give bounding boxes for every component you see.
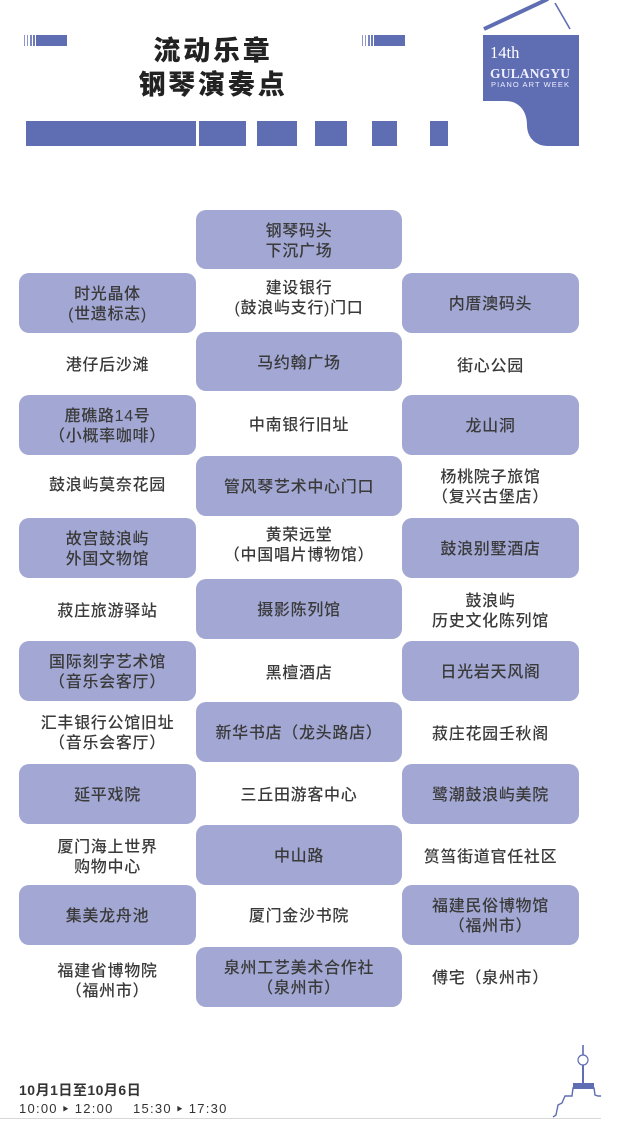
logo: piano art week: 14th: [490, 43, 520, 62]
venue: 杨桃院子旅馆: [432, 468, 549, 506]
bottom rule: [0, 1118, 601, 1119]
venue: 管风琴艺术中心门口: 管风琴艺术中心门口: [224, 479, 374, 496]
venue: 中山路: 中山路: [274, 848, 324, 865]
venue: 鼓浪屿莫奈花园: 鼓浪屿莫奈花园: [49, 477, 166, 494]
venue: 厦门海上世界购物中心: [57, 838, 158, 876]
venue: 国际刻字艺术馆: （音乐会客厅）: [49, 674, 166, 691]
venue: 菽庄花园壬秋阁: 菽庄花园壬秋阁: [432, 726, 549, 743]
venue: 日光岩天风阁: 日光岩天风阁: [440, 664, 541, 681]
venue: 福建省博物院: 福建省博物院: [57, 963, 158, 980]
venue: 新华书店: [196, 702, 402, 762]
venue: 鼓浪屿历史文化陈列馆: 鼓浪屿: [465, 593, 516, 610]
venue: 马约翰广场: [196, 332, 402, 391]
venue: 马约翰广场: 马约翰广场: [257, 354, 341, 372]
venue: 杨桃院子旅馆: 杨桃院子旅馆: [440, 469, 541, 486]
venue: 国际刻字艺术馆: 国际刻字艺术馆: [49, 654, 166, 671]
title: 流动乐章: [153, 36, 273, 66]
venue: 福建民俗博物馆: 福建民俗博物馆: [432, 898, 549, 915]
venue: 建设银行: (鼓浪屿支行)门口: [235, 300, 363, 317]
venue: 钢琴码头: 下沉广场: [266, 242, 332, 260]
venue: 中南银行旧址: 中南银行旧址: [249, 417, 349, 434]
venue: 内厝澳码头: [402, 273, 579, 333]
venue: 三丘田游客中心: 三丘田游客中心: [241, 787, 357, 804]
venue: 黄荣远堂: （中国唱片博物馆）: [224, 547, 374, 564]
decorative small bar left: [24, 35, 67, 46]
venue: 鼓浪屿历史文化陈列馆: [432, 592, 549, 630]
venue: 故宫鼓浪屿外国文物馆: [19, 518, 196, 578]
venue: 摄影陈列馆: [196, 579, 402, 639]
venue: 鼓浪别墅酒店: 鼓浪别墅酒店: [440, 541, 541, 558]
venue: 鼓浪别墅酒店: [402, 518, 579, 578]
venue: 鹿礁路14号: （小概率咖啡）: [49, 428, 166, 445]
venue: 新华书店: 新华书店（龙头路店）: [215, 725, 382, 742]
venue: 鹿礁路14号: [19, 395, 196, 455]
event dates and times: 10月1日至10月6日: [19, 1082, 141, 1098]
title: 钢琴演奏点: [138, 70, 288, 100]
venue: 街心公园: 街心公园: [457, 358, 524, 375]
venue: 泉州工艺美术合作社: [196, 947, 402, 1007]
venue: 集美龙舟池: 集美龙舟池: [66, 908, 149, 925]
venue: 厦门海上世界购物中心: 厦门海上世界: [57, 839, 158, 856]
venue: 鼓浪屿历史文化陈列馆: 历史文化陈列馆: [432, 613, 549, 630]
venue: 汇丰银行公馆旧址: （音乐会客厅）: [49, 735, 166, 752]
icon: tower skyline: [552, 1045, 601, 1118]
decorative small bar right: [362, 35, 405, 46]
venue: 厦门海上世界购物中心: 购物中心: [74, 859, 141, 876]
venue: 建设银行: 建设银行: [266, 280, 332, 297]
venue: 港仔后沙滩: 港仔后沙滩: [66, 357, 149, 374]
venue: 黄荣远堂: 黄荣远堂: [266, 527, 332, 544]
venue: 傅宅: 傅宅（泉州市）: [432, 970, 549, 987]
venue: 国际刻字艺术馆: [19, 641, 196, 701]
venue: 鹿礁路14号: 鹿礁路14号: [64, 408, 150, 425]
title: [138, 36, 288, 100]
venue: 建设银行: [235, 279, 363, 317]
venue: 黄荣远堂: [224, 526, 374, 564]
venue: 菽庄旅游驿站: 菽庄旅游驿站: [57, 603, 158, 620]
venue: 时光晶体: 时光晶体: [74, 286, 141, 303]
venue: 鹭潮鼓浪屿美院: [402, 764, 579, 824]
venue: 福建民俗博物馆: [402, 885, 579, 945]
venue: 龙山洞: 龙山洞: [465, 418, 516, 435]
venue: 摄影陈列馆: 摄影陈列馆: [257, 602, 341, 619]
venue: 管风琴艺术中心门口: [196, 456, 402, 516]
venue: 泉州工艺美术合作社: （泉州市）: [257, 980, 341, 997]
venue: 日光岩天风阁: [402, 641, 579, 701]
venue: 福建民俗博物馆: （福州市）: [449, 918, 532, 935]
event dates and times: [19, 1082, 228, 1116]
venue: 福建省博物院: （福州市）: [66, 983, 149, 1000]
venue: 延平戏院: [19, 764, 196, 824]
venue: 福建省博物院: [57, 962, 158, 1000]
venue: 集美龙舟池: [19, 885, 196, 945]
venue: 时光晶体: (世遗标志): [68, 306, 147, 323]
venue: 内厝澳码头: 内厝澳码头: [449, 296, 532, 313]
venue: 钢琴码头: [196, 210, 402, 269]
venue: 筼筜街道官任社区: 筼筜街道官任社区: [424, 849, 557, 866]
venue: 黑檀酒店: 黑檀酒店: [266, 665, 332, 682]
venue: 汇丰银行公馆旧址: [41, 714, 174, 752]
venue: 泉州工艺美术合作社: 泉州工艺美术合作社: [224, 960, 374, 977]
venue: 杨桃院子旅馆: （复兴古堡店）: [432, 489, 549, 506]
logo: piano art week: [483, 0, 579, 146]
logo: piano art week: PIANO ART WEEK: [491, 80, 569, 89]
venue: 延平戏院: 延平戏院: [74, 787, 141, 804]
event dates and times: 10:00 ▶ 12:00 15:30 ▶ 17:30: [19, 1101, 228, 1116]
header rhythm bars: [26, 121, 448, 146]
venue: 厦门金沙书院: 厦门金沙书院: [249, 908, 349, 925]
venue: 故宫鼓浪屿外国文物馆: 故宫鼓浪屿: [66, 531, 149, 548]
venue: 故宫鼓浪屿外国文物馆: 外国文物馆: [66, 551, 149, 568]
venue: 中山路: [196, 825, 402, 885]
venue: 龙山洞: [402, 395, 579, 455]
venue: 钢琴码头: 钢琴码头: [266, 222, 332, 240]
venue: 鹭潮鼓浪屿美院: 鹭潮鼓浪屿美院: [432, 787, 549, 804]
logo: piano art week: GULANGYU: [490, 66, 570, 81]
venue: 时光晶体: [19, 273, 196, 333]
venue: 汇丰银行公馆旧址: 汇丰银行公馆旧址: [41, 715, 174, 732]
